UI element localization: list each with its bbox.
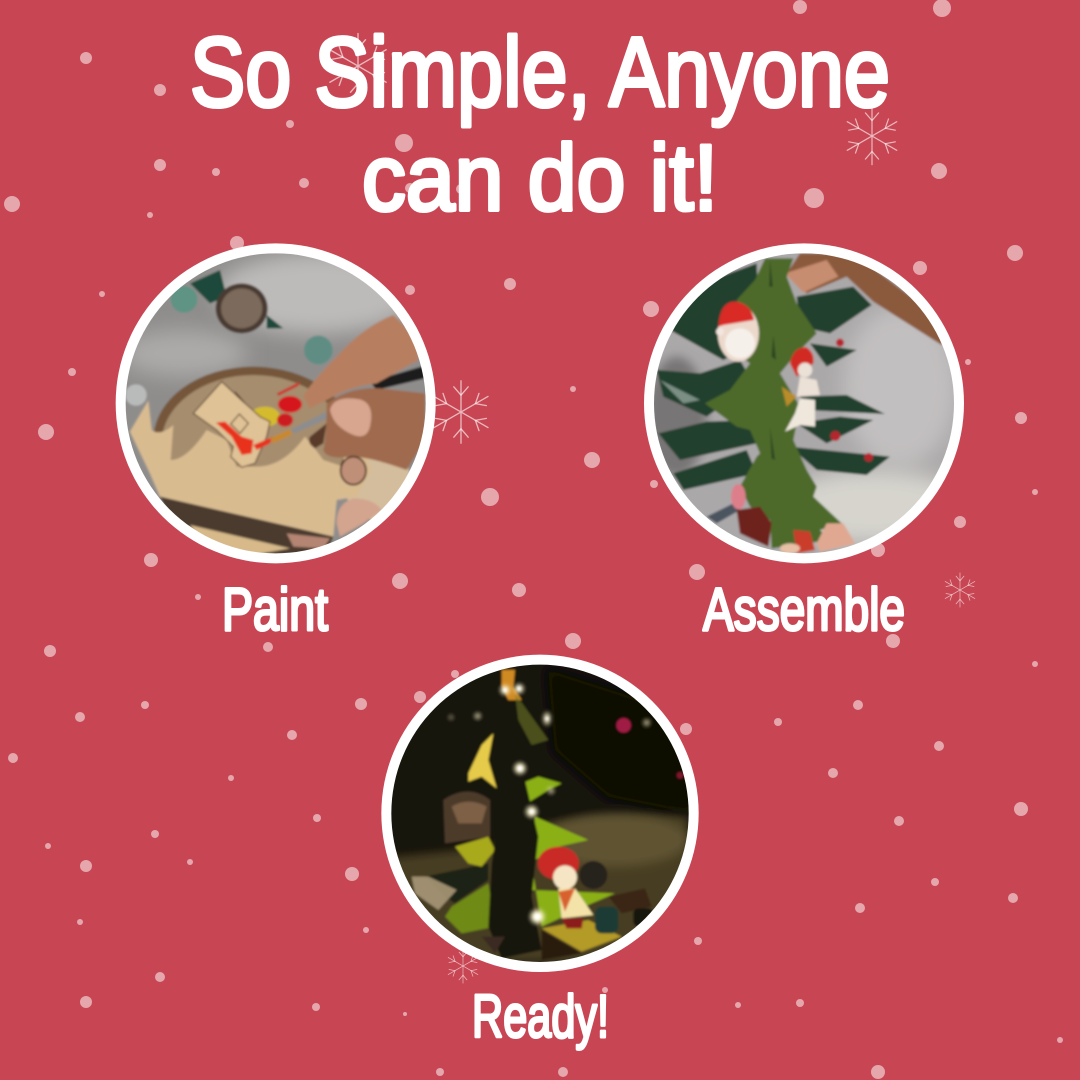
step 3: ready photo xyxy=(375,650,705,980)
title xyxy=(190,17,890,230)
step 3 label: Ready! xyxy=(472,983,609,1050)
step 2 label: Assemble xyxy=(703,576,905,643)
title: So Simple, Anyone xyxy=(190,17,890,127)
title: can do it! xyxy=(362,125,718,230)
step 2: assemble photo xyxy=(640,240,970,570)
step 1 label: Paint xyxy=(222,576,328,643)
step 1: paint photo xyxy=(110,240,440,570)
snowflake decorations xyxy=(330,34,975,983)
